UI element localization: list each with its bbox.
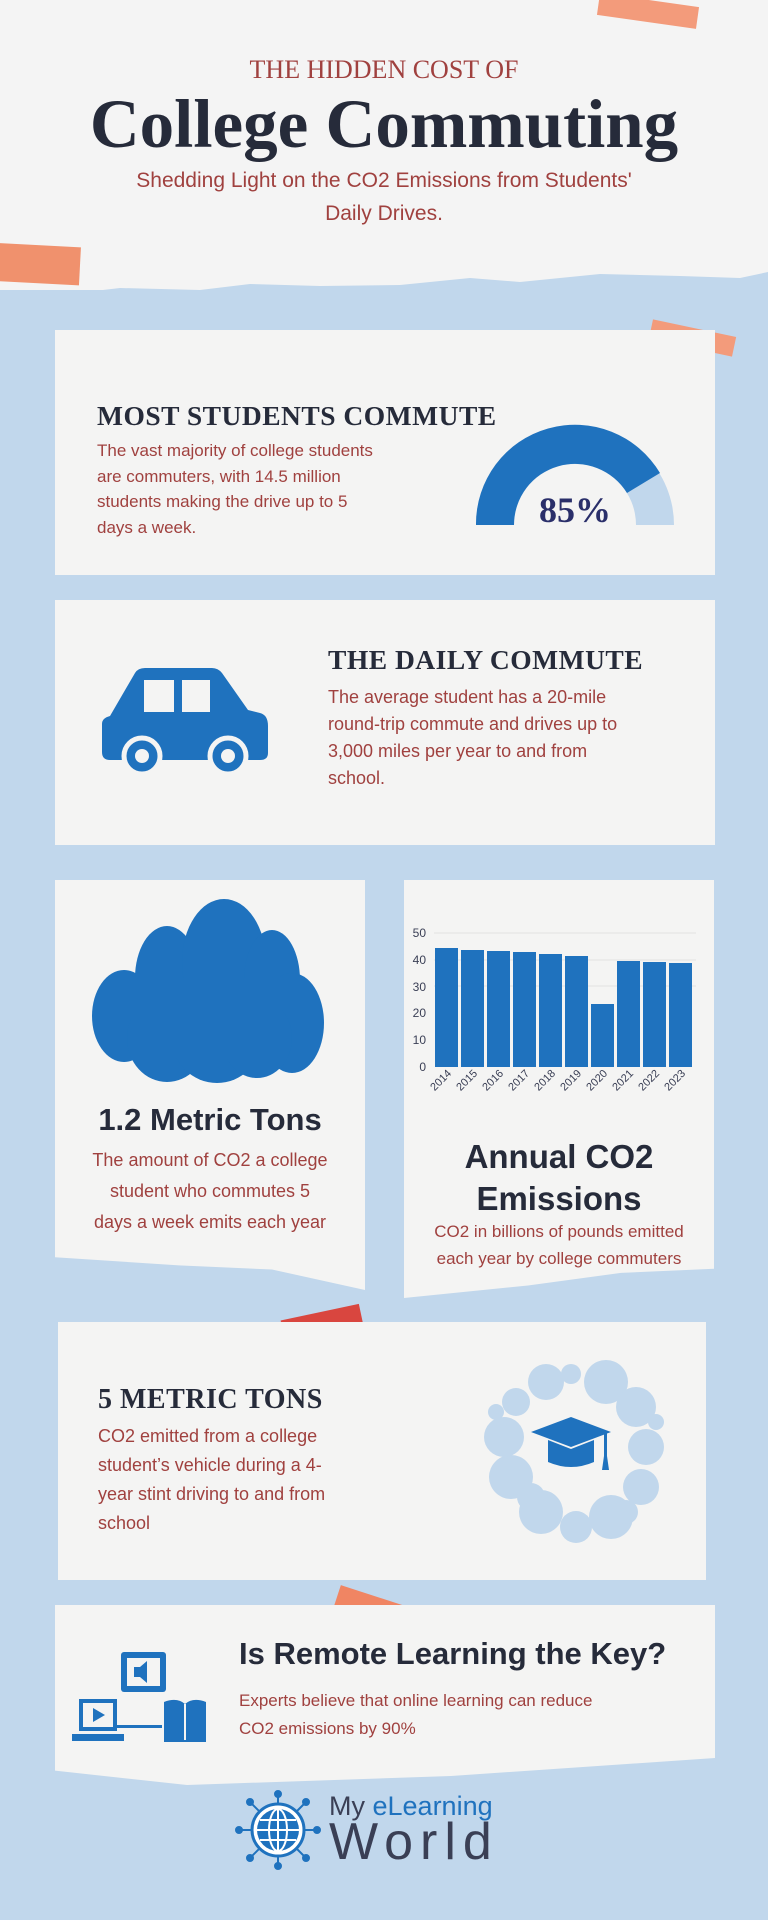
panel: remote learning (55, 1605, 715, 1785)
heading: 1.2 Metric Tons (98, 1102, 322, 1137)
heading: MOST STUDENTS COMMUTE (97, 400, 497, 431)
bar chart: 50 (413, 926, 426, 940)
bar chart: 20 (413, 1006, 426, 1020)
wordmark: My eLearning (329, 1791, 493, 1821)
icon: clouds with graduation cap (484, 1360, 664, 1543)
year labels: 2023 (662, 1068, 688, 1093)
year labels: 2022 (636, 1068, 662, 1093)
bar chart: 10 (413, 1033, 426, 1047)
body text (240, 1694, 592, 1738)
icon: globe (235, 1790, 321, 1870)
panel: annual CO2 chart (404, 880, 714, 1298)
year labels: 2016 (480, 1068, 506, 1093)
year labels: 2017 (506, 1068, 532, 1093)
tape decorations (597, 0, 699, 29)
title block: College Commuting (90, 86, 678, 162)
heading (466, 1144, 652, 1210)
title block: Daily Drives. (325, 202, 443, 225)
heading: Annual CO2 (465, 1138, 653, 1175)
bar chart: 30 (413, 980, 426, 994)
body text: Experts believe that online learning can reduce (239, 1691, 592, 1710)
panel: 1.2 metric tons (55, 880, 365, 1290)
title block: Shedding Light on the CO2 Emissions from Students' (136, 169, 632, 192)
heading: Is Remote Learning the Key? (239, 1636, 666, 1671)
logo (235, 1790, 499, 1871)
icon: devices (72, 1652, 206, 1742)
tape (281, 1304, 363, 1342)
icon: car (102, 668, 268, 772)
year labels: 2014 (428, 1068, 454, 1093)
body text: CO2 emitted from a college student’s vehicle during a 4-year stint driving to and from school (98, 1426, 325, 1533)
body text: CO2 emissions by 90% (239, 1719, 416, 1738)
body text: The average student has a 20-mile round-trip commute and drives up to 3,000 miles per year to and from school. (328, 687, 617, 788)
body text: CO2 in billions of pounds emitted each year by college commuters (434, 1222, 684, 1268)
logo: World (329, 1813, 499, 1871)
body text: The amount of CO2 a college student who commutes 5 days a week emits each year (92, 1150, 328, 1232)
year labels: 2018 (532, 1068, 558, 1093)
header background (0, 0, 768, 290)
heading: 5 METRIC TONS (98, 1384, 323, 1415)
bar chart: 0 (419, 1060, 426, 1074)
year labels (430, 1069, 685, 1091)
panel: 5 metric tons (58, 1322, 706, 1580)
torn edge header (104, 272, 768, 290)
year labels: 2021 (610, 1068, 636, 1093)
bar chart (412, 928, 696, 1071)
panel: most students commute (55, 330, 715, 575)
year labels: 2015 (454, 1068, 480, 1093)
icon: cloud (92, 899, 324, 1083)
title block: THE HIDDEN COST OF (250, 55, 518, 84)
title block (90, 55, 678, 225)
tape (334, 1585, 436, 1637)
heading: Emissions (476, 1180, 642, 1217)
heading: THE DAILY COMMUTE (328, 644, 643, 675)
panel: daily commute (55, 600, 715, 845)
year labels: 2019 (558, 1068, 584, 1093)
bar chart: 40 (413, 953, 426, 967)
gauge chart (476, 424, 674, 526)
year labels: 2020 (584, 1068, 610, 1093)
body text: The vast majority of college students are commuters, with 14.5 million students making the drive up to 5 days a week. (97, 441, 373, 536)
